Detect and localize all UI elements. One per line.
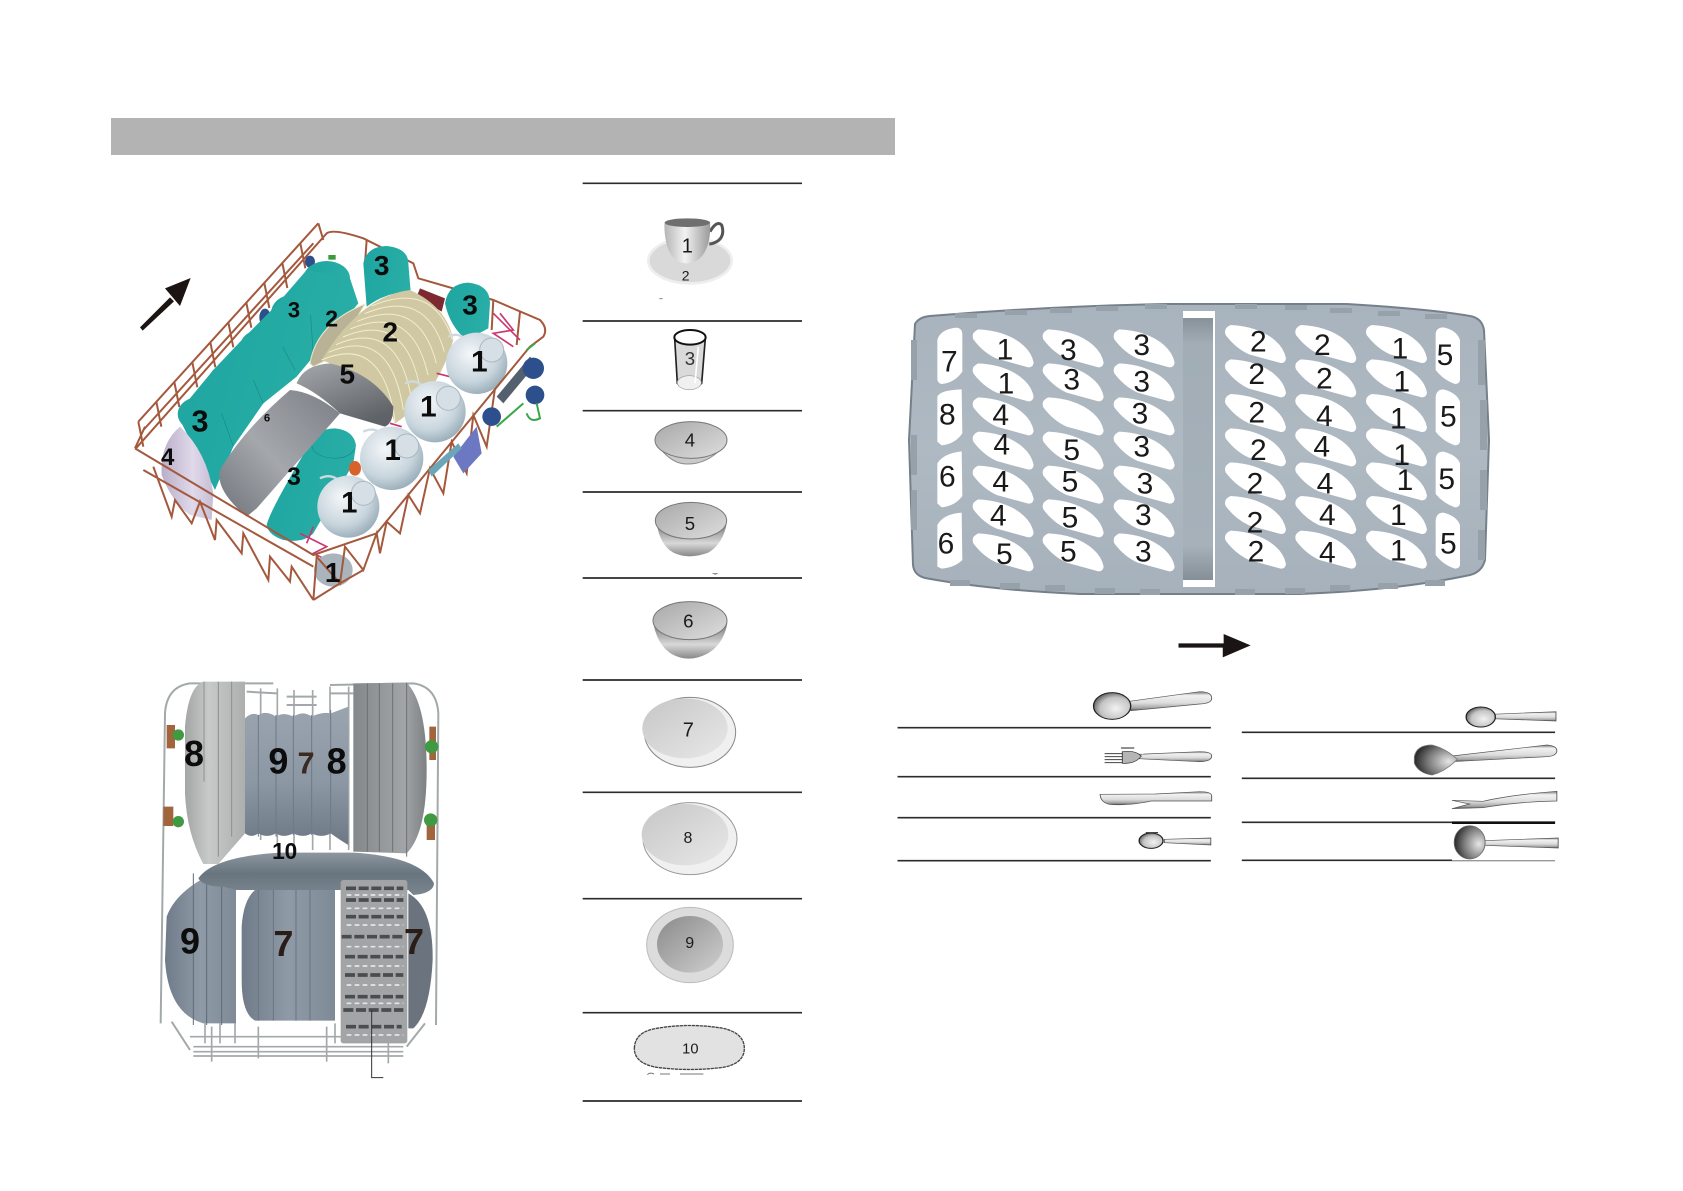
right slot numbers: 1 (1392, 332, 1408, 365)
crockery legend upper (583, 183, 802, 659)
upper rack illustration (135, 223, 545, 600)
lower left plates (165, 873, 236, 1025)
direction arrow (140, 278, 191, 331)
glass (674, 330, 706, 390)
left slot numbers: 3 (1133, 431, 1150, 464)
cutlery legend (898, 634, 1558, 861)
right slot numbers: 4 (1316, 400, 1333, 433)
upper rack numbers: 3 (287, 464, 301, 491)
serving spoon (1414, 745, 1557, 775)
left slot numbers: 4 (990, 500, 1007, 533)
cup and saucer: 2 (682, 268, 690, 284)
left slot numbers: 7 (941, 346, 958, 379)
right slot numbers: 1 (1390, 535, 1407, 568)
rack clips (163, 725, 438, 840)
ladle (1454, 826, 1558, 859)
platter 10 (634, 1025, 744, 1075)
blue rack clips rear (259, 255, 336, 326)
right side slots (1436, 327, 1460, 569)
item 2 small plate (310, 304, 365, 367)
rack frame (161, 683, 438, 1063)
plate 7 (642, 697, 736, 767)
left slot numbers: 1 (998, 367, 1014, 400)
upper rack numbers: 3 (374, 250, 389, 281)
upper rack numbers (161, 250, 488, 588)
glass: 3 (685, 348, 695, 369)
lower middle plates (242, 890, 335, 1021)
right slot numbers: 2 (1247, 467, 1263, 500)
left slot numbers: 3 (1135, 499, 1152, 532)
plate 8: 8 (684, 830, 693, 847)
legend dividers (898, 728, 1555, 861)
left slot numbers: 6 (939, 461, 956, 494)
right slot numbers: 2 (1250, 434, 1267, 467)
upper rack numbers: 4 (161, 444, 175, 471)
angled slots (1225, 325, 1427, 569)
fork (1105, 748, 1212, 763)
orange accent (349, 461, 361, 476)
small spoon (1466, 707, 1556, 727)
item 1 cups (314, 333, 507, 587)
right slot numbers: 2 (1250, 326, 1267, 359)
lower rack numbers: 8 (184, 733, 204, 774)
plate 7: 7 (683, 720, 694, 742)
left slot numbers: 4 (993, 428, 1010, 461)
centre channel (1183, 311, 1215, 587)
knife (1100, 792, 1212, 805)
tray right section (1225, 325, 1460, 570)
left slot numbers: 3 (1137, 467, 1153, 500)
bowl 6: 6 (683, 611, 694, 632)
right slot numbers: 2 (1247, 506, 1263, 539)
maroon rack part (417, 288, 445, 312)
right slot numbers: 4 (1313, 431, 1330, 464)
right slot numbers (1247, 326, 1457, 570)
right slot numbers: 5 (1438, 463, 1455, 496)
bowl 5 (655, 502, 727, 575)
item 6 large bowl (219, 390, 340, 517)
cutlery basket (341, 880, 407, 1043)
lower rack illustration (161, 682, 438, 1078)
upper rack numbers: 2 (325, 306, 338, 332)
bowl 4: 4 (685, 430, 695, 451)
upper middle plates (245, 707, 348, 845)
right slot numbers: 4 (1319, 499, 1336, 532)
left slot numbers: 3 (1063, 363, 1080, 396)
bowl 4 (655, 422, 727, 464)
lower rack numbers: 10 (272, 838, 297, 864)
item 2 stacked plates (322, 290, 453, 423)
plate 9 (647, 907, 733, 983)
right slot numbers: 5 (1440, 527, 1457, 560)
tray direction arrow (1179, 634, 1251, 657)
upper rack numbers: 2 (383, 317, 398, 348)
item 10 platter (198, 853, 434, 895)
left slot numbers: 5 (1062, 501, 1078, 534)
glass rim highlights (222, 315, 355, 458)
upper rack numbers: 5 (340, 358, 355, 389)
item 5 bowl (297, 363, 393, 427)
basket leader line (372, 1010, 383, 1078)
upper rack numbers: 1 (325, 557, 340, 588)
cup and saucer (648, 218, 732, 299)
lower rack numbers: 7 (273, 923, 293, 964)
plate 8 (642, 803, 737, 875)
bowl 6 (653, 602, 727, 659)
lower rack numbers: 9 (268, 740, 288, 781)
serving fork (1452, 791, 1557, 809)
upper left plates (185, 682, 245, 864)
crockery legend lower (583, 680, 802, 1101)
right slot numbers: 2 (1316, 362, 1333, 395)
platter 10: 10 (682, 1042, 698, 1058)
lower rack numbers: 8 (327, 740, 347, 781)
right slot numbers: 4 (1319, 537, 1336, 570)
left slot numbers: 4 (992, 466, 1009, 499)
left side slots (937, 328, 962, 569)
left slot numbers: 5 (1063, 434, 1080, 467)
cutlery tray (909, 304, 1489, 595)
legend dividers (583, 680, 802, 1101)
left slot numbers: 5 (1062, 466, 1078, 499)
right slot numbers: 1 (1390, 402, 1407, 435)
upper rack numbers: 3 (462, 289, 478, 320)
right slot numbers: 1 (1397, 464, 1413, 497)
left slot numbers: 3 (1133, 329, 1150, 362)
header bar (111, 118, 895, 155)
tray left section (937, 328, 1175, 571)
right slot numbers: 2 (1248, 396, 1265, 429)
right slot numbers: 5 (1440, 401, 1457, 434)
left slot numbers: 1 (997, 333, 1013, 366)
spoon 1 (1094, 692, 1212, 719)
teaspoon (1139, 833, 1211, 848)
right slot numbers: 1 (1393, 366, 1410, 399)
left slot numbers: 3 (1135, 536, 1152, 569)
left slot numbers (938, 329, 1153, 571)
right slot numbers: 2 (1248, 358, 1265, 391)
left slot numbers: 3 (1132, 397, 1148, 430)
upper rack numbers: 1 (471, 346, 488, 379)
right slot numbers: 1 (1393, 439, 1410, 472)
lower rack numbers: 7 (297, 746, 315, 780)
upper rack numbers: 1 (420, 391, 437, 424)
left slot numbers: 8 (939, 398, 956, 431)
lower rack numbers: 7 (404, 921, 424, 962)
left slot numbers: 5 (996, 538, 1013, 571)
tray edge tabs (911, 304, 1487, 595)
cup and saucer: 1 (682, 236, 693, 258)
bowl 5: 5 (685, 513, 695, 534)
plate 9: 9 (685, 935, 694, 952)
left slot numbers: 6 (938, 527, 954, 560)
left slot numbers: 4 (992, 399, 1009, 432)
upper right plates (353, 683, 427, 857)
rack back wires (136, 223, 545, 448)
upper rack numbers: 6 (264, 413, 270, 425)
upper rack numbers: 1 (341, 487, 357, 520)
left slot numbers: 3 (1060, 334, 1077, 367)
legend dividers (583, 183, 802, 578)
right slot numbers: 5 (1437, 339, 1453, 372)
upper rack numbers: 1 (385, 434, 401, 467)
lower rack numbers: 9 (180, 920, 200, 961)
right slot numbers: 2 (1248, 536, 1264, 569)
rack front wires (135, 347, 530, 600)
upper rack numbers: 3 (191, 405, 209, 439)
side rack clips (428, 343, 544, 477)
pink rack clips (300, 313, 520, 563)
lower right plates (408, 893, 433, 1028)
item 4 bowl (162, 427, 213, 520)
right slot numbers: 1 (1390, 499, 1407, 532)
tray body (909, 304, 1489, 594)
upper rack numbers: 3 (288, 297, 300, 322)
left slot numbers: 5 (1060, 536, 1077, 569)
right slot numbers: 4 (1317, 467, 1333, 500)
item 3 glasses (178, 246, 490, 541)
lower rack numbers (180, 733, 424, 964)
left slot numbers: 3 (1133, 366, 1150, 399)
right slot numbers: 2 (1314, 329, 1331, 362)
angled slots (973, 329, 1175, 571)
